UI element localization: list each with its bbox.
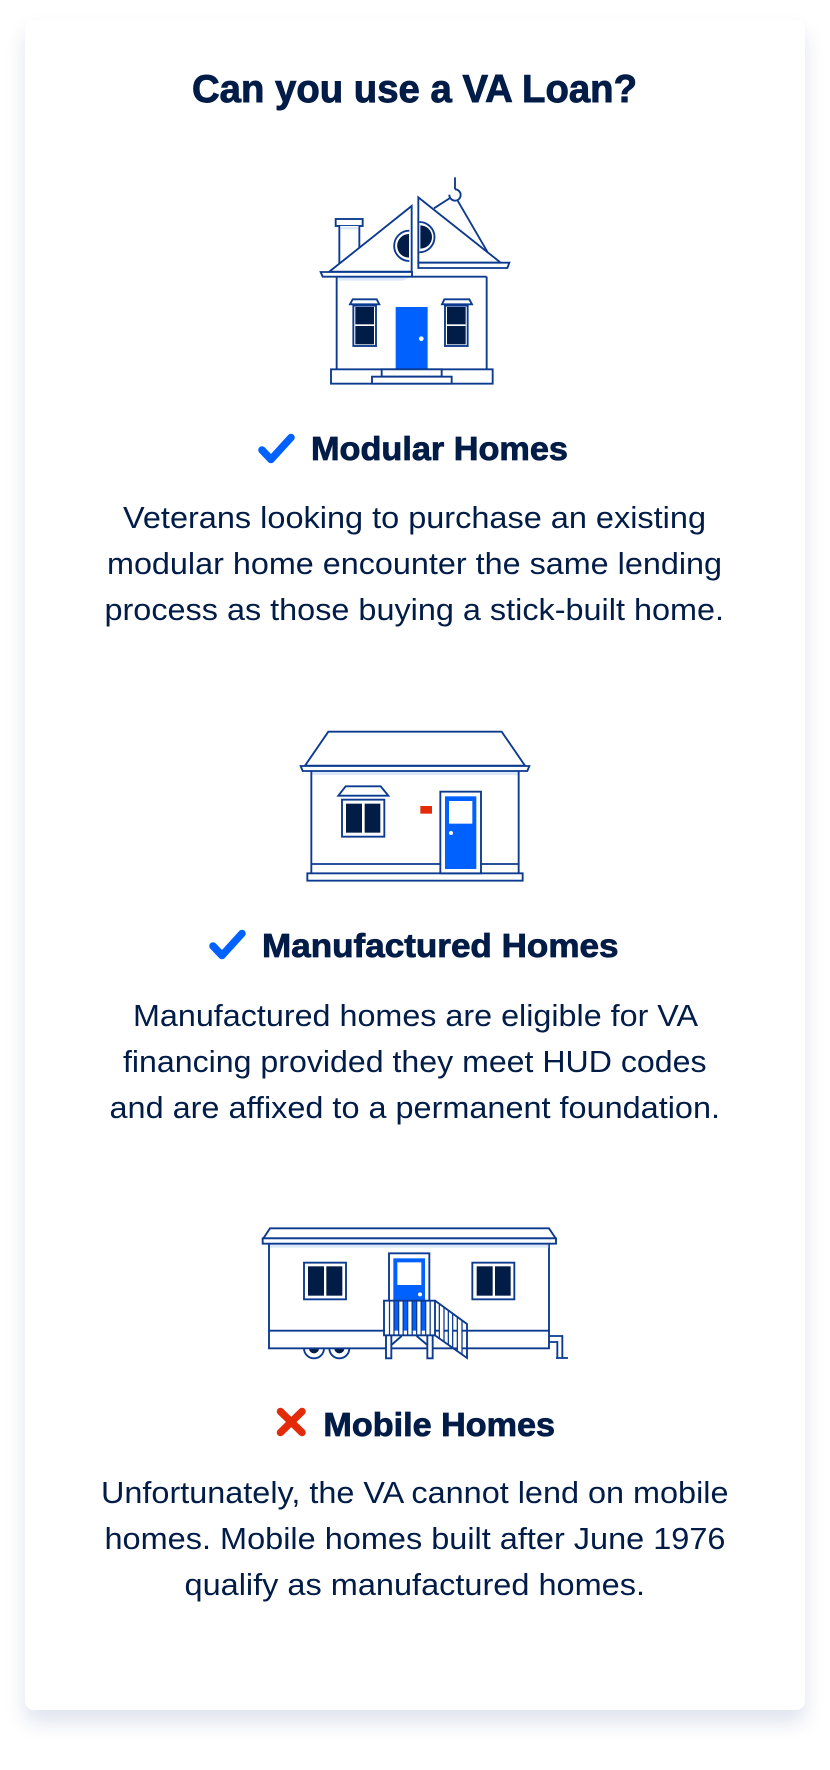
text block: modular homes: Veterans looking to purchase an existing <box>123 500 706 535</box>
text block: mobile homes: Unfortunately, the VA cannot lend on mobile <box>101 1475 728 1510</box>
text block: manufactured homes: financing provided they meet HUD codes <box>123 1044 706 1079</box>
text block: modular homes: process as those buying a stick-built home. <box>104 592 724 627</box>
heading: manufactured homes: Manufactured Homes <box>262 927 618 964</box>
text block: mobile homes: homes. Mobile homes built after June 1976 <box>104 1521 726 1556</box>
icon: red cross <box>280 1412 302 1432</box>
stairs <box>435 1301 467 1358</box>
icon: modular home being craned <box>321 177 509 384</box>
legs and braces <box>386 1335 391 1358</box>
icon: check mark <box>213 934 242 956</box>
deck railing <box>384 1301 435 1335</box>
text block: mobile homes: qualify as manufactured homes. <box>184 1567 645 1602</box>
title: Can you use a VA Loan? <box>192 68 637 111</box>
text block: modular homes <box>104 500 724 627</box>
text block: mobile homes <box>101 1475 728 1602</box>
text block: manufactured homes: and are affixed to a permanent foundation. <box>110 1090 720 1125</box>
heading: modular homes: Modular Homes <box>311 430 568 467</box>
hitch <box>549 1336 568 1358</box>
icon: manufactured home <box>301 732 529 881</box>
heading: mobile homes: Mobile Homes <box>323 1406 555 1443</box>
text block: manufactured homes: Manufactured homes are eligible for VA <box>133 998 698 1033</box>
text block: modular homes: modular home encounter the same lending <box>107 546 722 581</box>
icon: check mark <box>262 438 291 460</box>
text block: manufactured homes <box>110 998 720 1125</box>
icon: mobile home <box>263 1228 568 1358</box>
